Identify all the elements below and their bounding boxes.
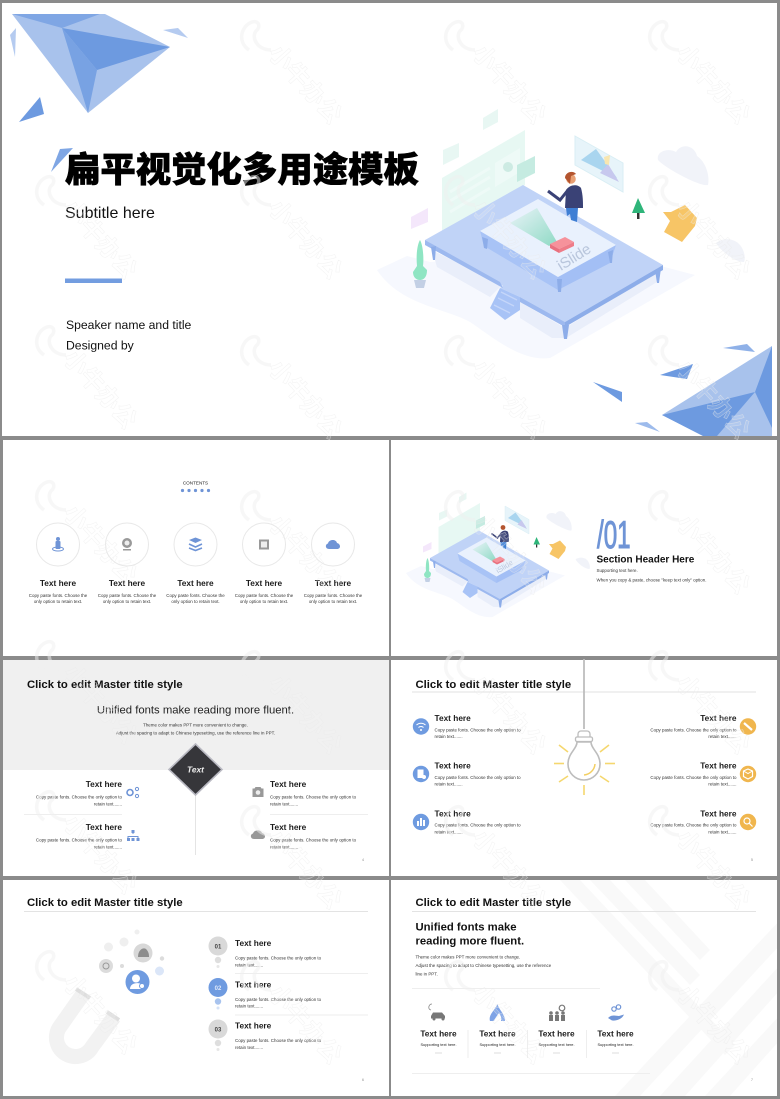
feature 4: Supporting text here. [597,1042,634,1047]
watermark layer: 小牛办公 [671,825,755,914]
watermark layer: 小牛办公 [467,510,551,599]
item 2: Copy paste fonts. Choose the [98,593,157,598]
magnet illustration [56,930,164,1057]
watermark layer: 小牛办公 [263,670,347,759]
watermark layer: 小牛办公 [58,345,142,434]
feature 4: Text here [597,1028,634,1038]
left item 1: Text here [434,713,471,723]
feature 1 [420,1004,457,1053]
speaker text: Speaker name and title [66,318,192,332]
step 03: 03 [215,1028,222,1034]
step 02: 02 [215,986,222,992]
supporting lines [116,722,275,736]
left item 1 [413,713,521,739]
left item 2 [413,761,521,786]
slide title: Click to edit Master title style [416,679,571,691]
panel: light bulb slide [391,659,777,876]
left item 2: Copy paste fonts. Choose the only option to [36,838,123,842]
item 4: Copy paste fonts. Choose the [235,593,294,598]
left item 1: retain text....... [434,734,463,739]
feature 4 [586,1005,634,1058]
watermark layer: 小牛办公 [671,195,755,284]
watermark layer: 小牛办公 [58,660,142,749]
headline: Unified fonts make [416,922,517,934]
body text: Adjust the spacing to adapt to Chinese typesetting, use the reference [416,963,552,968]
item 2: only option to retain text. [103,599,151,604]
headline: reading more fluent. [416,936,524,948]
right item 2: Text here [700,761,737,771]
accent bar [65,278,122,283]
right item 2: Copy paste fonts. Choose the only option to [270,838,357,842]
right item 1 [650,713,756,739]
supporting text: Supporting text here. [596,568,638,573]
title rule [412,910,756,912]
small isometric illustration [406,492,590,617]
left item 3: Copy paste fonts. Choose the only option to [434,823,521,828]
speaker text: Designed by [66,338,135,352]
watermark layer: 小牛办公 [467,195,551,284]
watermark layer: 小牛办公 [467,355,551,444]
right item 1: Copy paste fonts. Choose the only option to [270,794,357,800]
decoration: bottom-right polygons [593,344,772,436]
slide title: Click to edit Master title style [27,897,183,909]
watermark layer: 小牛办公 [263,40,347,129]
item 3: Copy paste fonts. Choose the [166,593,225,598]
feature 1: Text here [420,1028,457,1038]
watermark layer: 小牛办公 [58,970,142,1059]
right item 3 [650,808,756,834]
item 5: Copy paste fonts. Choose the [304,593,363,598]
step 01 [208,936,322,968]
body text: Theme color makes PPT more convenient to change. [416,954,520,960]
contents label: CONTENTS [183,480,208,486]
step 01: retain text....... [235,962,263,967]
feature 3: Text here [538,1028,575,1038]
slide title: Click to edit Master title style [27,679,183,691]
watermark layer: 小牛办公 [263,195,347,284]
body text [416,954,552,976]
page number: 5 [751,858,753,862]
item 3: only option to retain text. [171,599,220,604]
left item 3: Text here [434,808,471,818]
item 4: Text here [246,578,283,588]
right item 1: retain text....... [708,734,736,739]
page number: 4 [362,858,364,862]
left item 3: retain text....... [434,829,463,834]
isometric illustration: iSlide [554,241,594,274]
center spine [194,795,196,855]
watermark layer: 小牛办公 [671,40,755,129]
right item 2: retain text....... [708,782,736,786]
step 03: Text here [235,1021,272,1031]
watermark layer: 小牛办公 [467,40,551,129]
step 02 [208,974,368,1010]
panel: section header slide [391,440,777,656]
item 5: only option to retain text. [309,599,357,604]
right item 1: Copy paste fonts. Choose the only option to [650,728,737,732]
right item 1: Text here [270,779,307,789]
title: 扁平视觉化多用途模板 [65,142,419,193]
background stripes [560,880,780,1096]
watermark layer: 小牛办公 [263,510,347,599]
left item 1: Copy paste fonts. Choose the only option to [36,794,123,800]
item 1: Copy paste fonts. Choose the [29,593,88,598]
right item 1 [252,779,357,806]
watermark layer: 小牛办公 [467,825,551,914]
page number: 7 [751,1078,753,1082]
body text: line in PPT. [416,972,438,976]
watermark layer: 小牛办公 [263,980,347,1069]
right item 1: Text here [700,713,737,723]
watermark layer: 小牛办公 [467,980,551,1069]
right item 1: retain text....... [270,802,298,806]
watermark layer: 小牛办公 [58,195,142,284]
feature 2: Supporting text here. [479,1042,516,1047]
speaker text [66,318,192,352]
left item 1 [36,779,139,806]
item 2: Text here [109,578,146,588]
left item 3 [413,808,521,834]
left item 2 [24,814,140,850]
step 01: Text here [235,938,272,948]
right item 2 [251,814,368,850]
left item 1: Text here [86,779,122,789]
supporting text: When you copy & paste, choose "keep text only" option. [596,578,706,582]
section number: /01 [597,513,631,556]
subtitle: Subtitle here [65,205,155,222]
step 01: 01 [215,944,222,950]
panel: cover slide [2,3,777,436]
item 3 [166,523,225,604]
small isometric illustration: iSlide [494,558,515,575]
right item 3: Text here [700,808,737,818]
left item 2: Text here [86,822,122,832]
section heading: Section Header Here [596,554,695,566]
watermark layer: 小牛办公 [671,670,755,759]
item 2 [98,523,157,604]
decoration: top-left polygons [10,14,188,172]
panel: four features slide [391,880,780,1096]
item 5 [304,523,363,604]
right item 2: Copy paste fonts. Choose the only option to [650,775,737,780]
feature 2 [468,1004,516,1058]
right item 2: Text here [270,822,307,832]
slide title: Click to edit Master title style [416,897,571,909]
watermark layer: 小牛办公 [671,510,755,599]
panel: magnet slide [3,880,389,1096]
title rule [24,910,368,912]
diamond badge: Text [187,764,205,774]
right item 2: retain text....... [270,844,298,850]
headline: Unified fonts make reading more fluent. [97,704,294,716]
watermark layer: 小牛办公 [58,810,142,899]
feature 2: Text here [479,1028,516,1038]
item 3: Text here [177,578,214,588]
item 1: only option to retain text. [34,599,82,604]
watermark layer: 小牛办公 [671,355,755,444]
title rule [412,691,756,693]
left item 2: Text here [434,761,471,771]
item 4: only option to retain text. [240,599,288,604]
step 01: Copy paste fonts. Choose the only option to [235,956,322,960]
left item 2: Copy paste fonts. Choose the only option to [434,775,521,780]
supporting lines: Theme color makes PPT more convenient to change. [143,722,248,728]
left item 1: Copy paste fonts. Choose the only option to [434,728,521,732]
step 03: retain text....... [235,1045,263,1050]
watermark layer: 小牛办公 [58,500,142,589]
item 1: Text here [40,578,77,588]
item 1 [29,523,88,604]
step 02: retain text....... [235,1004,263,1009]
hanging light bulb [554,659,615,795]
divider [412,988,600,990]
isometric illustration [377,109,745,358]
step 03: Copy paste fonts. Choose the only option to [235,1038,322,1043]
right item 2 [650,761,756,786]
supporting text [596,568,706,582]
feature 3 [528,1005,575,1058]
pagination dots [181,489,210,492]
left item 2: retain text....... [434,782,463,786]
watermark layer: 小牛办公 [263,355,347,444]
item 5: Text here [315,578,352,588]
diamond badge [169,744,222,795]
right item 3: retain text....... [708,829,736,834]
feature 3: Supporting text here. [538,1042,575,1047]
headline [416,922,524,948]
feature 1: Supporting text here. [420,1042,457,1047]
panel: contents slide [3,440,389,656]
watermark layer: 小牛办公 [263,825,347,914]
left item 2: retain text....... [94,844,122,850]
supporting lines: Adjust the spacing to adapt to Chinese typesetting, use the reference line in PPT. [116,730,275,736]
watermark layer: 小牛办公 [671,980,755,1069]
step 03 [208,1015,368,1051]
panel: diamond slide [3,660,389,876]
page number: 6 [362,1078,364,1082]
item 4 [235,523,294,604]
bottom rule [412,1072,650,1074]
step 02: Copy paste fonts. Choose the only option to [235,997,322,1002]
watermark layer: 小牛办公 [467,670,551,759]
step 02: Text here [235,979,272,989]
right item 3: Copy paste fonts. Choose the only option to [650,823,737,828]
left item 1: retain text....... [94,802,122,806]
